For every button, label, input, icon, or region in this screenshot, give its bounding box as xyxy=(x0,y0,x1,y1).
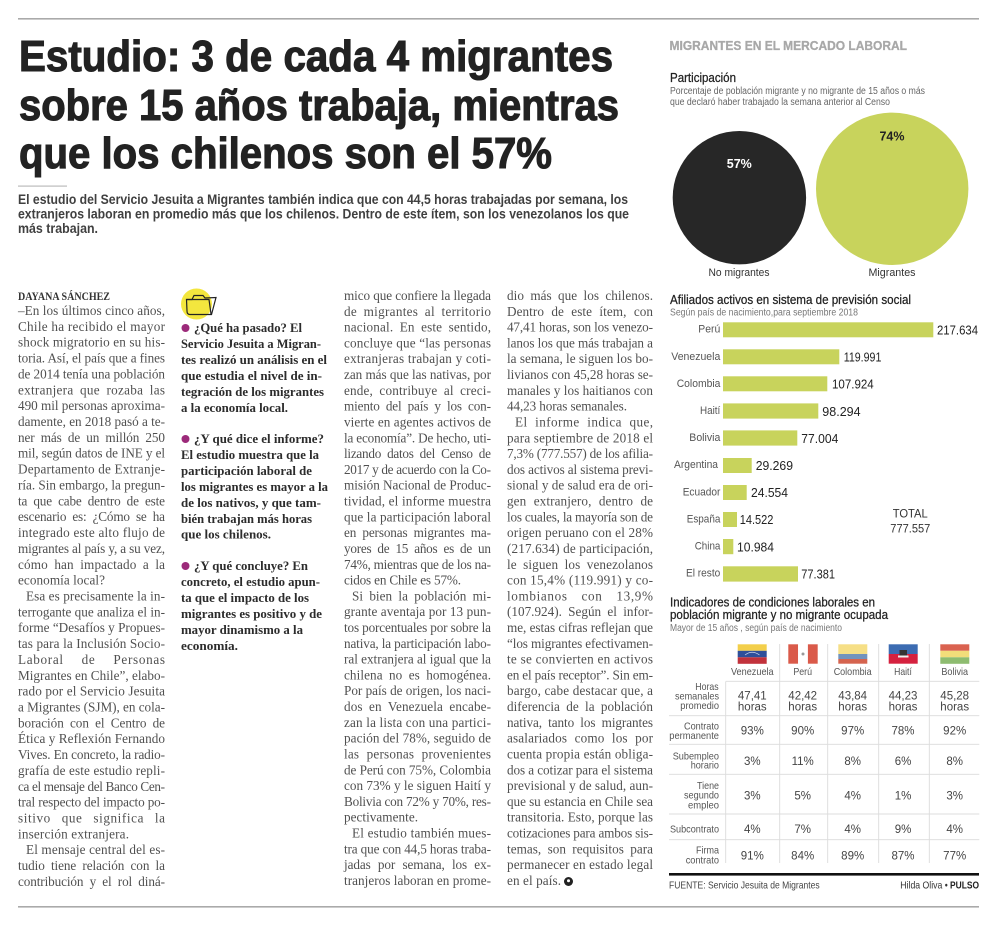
article column 3: zan más que las nativas, por xyxy=(344,367,492,382)
article column 1: 490 mil personas aproxima- xyxy=(18,398,165,413)
article column 4: permanecer en estado legal xyxy=(507,857,653,872)
article column 3: 2017 y de acuerdo con la Co- xyxy=(344,462,491,477)
article column 1: Esa es precisamente la in- xyxy=(26,588,165,604)
question: what the report says: participación laboral de xyxy=(181,463,312,478)
table values: 77% xyxy=(943,850,966,862)
article column 3: miento del país y los con- xyxy=(344,399,491,414)
bar values: 10.984 xyxy=(737,540,774,554)
table values: 45,28 xyxy=(940,691,969,703)
table values: horas xyxy=(738,702,767,714)
article column 4: la semana, le siguen los bo- xyxy=(507,351,653,366)
table values: 90% xyxy=(791,726,814,738)
bar labels: Bolivia xyxy=(689,432,721,444)
bar labels: Haití xyxy=(700,405,720,417)
article column 3: grante aventaja por 13 pun- xyxy=(344,604,491,619)
article column 4: dio más que los chilenos. xyxy=(507,288,653,303)
flag: Bolivia xyxy=(940,644,969,664)
question: what happened: Servicio Jesuita a Migran- xyxy=(181,336,321,351)
icon: Pulso end mark xyxy=(564,877,573,886)
country names: Perú xyxy=(793,666,812,678)
question: what the report says: bién trabajan más horas xyxy=(181,511,312,526)
subtitle: más trabajan. xyxy=(18,220,98,236)
table values: 4% xyxy=(946,824,963,836)
circle: non-migrants 57%: 57% xyxy=(727,157,752,171)
table values: 44,23 xyxy=(889,691,917,703)
panel heading: migrants in the labour market: MIGRANTES EN EL MERCADO LABORAL xyxy=(670,39,907,53)
question: what it concludes: concreto, el estudio apun- xyxy=(181,574,320,589)
article column 1: ner más de un millón 250 xyxy=(18,430,165,445)
title: que los chilenos son el 57% xyxy=(19,129,552,178)
article column 1: extranjera que rozaba las xyxy=(18,382,165,397)
row labels: Tiene xyxy=(697,780,719,792)
article column 4: (107.924). Según el infor- xyxy=(507,604,653,619)
row labels xyxy=(669,681,719,866)
table values: 89% xyxy=(841,850,864,862)
article column 4: 7,3% (777.557) de los afilia- xyxy=(507,446,653,461)
row labels: semanales xyxy=(675,690,719,702)
flag: Colombia xyxy=(838,644,867,664)
article column 1: ría. Sin embargo, la pregun- xyxy=(18,478,165,492)
table values: 4% xyxy=(844,790,861,802)
table values: 9% xyxy=(895,824,911,836)
bar labels xyxy=(671,324,721,580)
question: what it concludes: mayor dinamismo a la xyxy=(181,622,303,637)
article column 3: que la participación laboral xyxy=(344,509,491,524)
subtitle: El estudio del Servicio Jesuita a Migrantes también indica que con 44,5 horas trabajadas por semana, los xyxy=(18,191,628,207)
article column 3: nacional. En este sentido, xyxy=(344,320,491,335)
article column 1: tudio tiene relación con la xyxy=(18,858,165,873)
bar chart heading: Afiliados activos en sistema de previsión social xyxy=(670,293,911,307)
article column 1: Vives. En concreto, la radio- xyxy=(18,747,165,762)
table values: 43,84 xyxy=(838,691,868,703)
row labels: promedio xyxy=(680,700,719,712)
bar values: 217.634 xyxy=(937,324,978,338)
article column 1: cómo han impactado a la xyxy=(18,557,165,572)
article column 4 xyxy=(507,288,654,888)
row labels: Subempleo xyxy=(673,750,719,762)
article column 3: vierte en agentes activos de xyxy=(344,414,491,430)
table values xyxy=(738,691,969,862)
panel: labour conditions table xyxy=(669,596,979,866)
article column 1: de 2014 tenía una población xyxy=(18,366,165,381)
question: what the report says: de los nativos, y que tam- xyxy=(181,495,321,510)
table values: 87% xyxy=(891,850,915,862)
table values: 3% xyxy=(744,790,761,802)
table values: horas xyxy=(940,702,969,714)
question: what it concludes: ¿Y qué concluye? En xyxy=(194,558,309,573)
article column 3: dos en Venezuela encabe- xyxy=(344,699,491,714)
row labels: Subcontrato xyxy=(670,823,719,835)
article column 1: a Migrantes (SJM), en cola- xyxy=(18,700,165,714)
table heading: Mayor de 15 años , según país de nacimiento xyxy=(670,623,842,634)
article column 4: 47,41 horas, son los venezo- xyxy=(507,320,653,335)
table values: 3% xyxy=(946,790,963,802)
bar labels: Venezuela xyxy=(671,351,721,363)
row labels: Horas xyxy=(695,681,719,693)
question: what happened: que estudia el nivel de in- xyxy=(181,368,322,383)
article column 3: pectivamente. xyxy=(344,810,418,825)
article column 3 xyxy=(343,288,492,888)
bar values: 98.294 xyxy=(822,405,861,419)
bar values: 107.924 xyxy=(832,378,874,392)
question: what it concludes: migrantes es positivo y de xyxy=(181,606,322,621)
total callout: 777.557 xyxy=(890,523,930,535)
table values: 97% xyxy=(841,726,864,738)
article column 1: Laboral de Personas xyxy=(18,652,165,667)
table values: 11% xyxy=(792,756,814,768)
article column 4: asalariados como los por xyxy=(507,731,654,746)
circle: non-migrants 57% xyxy=(673,131,806,279)
article column 1: inserción extranjera. xyxy=(18,826,129,841)
question: what happened: a la economía local. xyxy=(181,400,288,415)
article column 4: “los migrantes efectivamen- xyxy=(507,636,653,651)
article column 1: integrado este alto flujo de xyxy=(18,525,165,540)
article column 3: con 73% y le siguen Haití y xyxy=(344,778,491,793)
article column 3: 74%, mientras que de los na- xyxy=(344,557,491,572)
article column 1: El mensaje central del es- xyxy=(26,842,165,857)
article column 1: toria. Así, el país que a fines xyxy=(18,351,165,366)
article column 1: Ética y Reflexión Fernando xyxy=(18,731,165,746)
question: what the report says: que los chilenos. xyxy=(181,526,271,542)
participation heading: Porcentaje de población migrante y no migrante de 15 años o más xyxy=(670,86,925,97)
participation heading xyxy=(670,71,925,108)
table values: horas xyxy=(788,702,817,714)
flag: Haiti xyxy=(889,644,918,664)
circle: non-migrants 57%: No migrantes xyxy=(708,267,770,279)
table heading: Indicadores de condiciones laborales en xyxy=(670,596,875,610)
article column 1: mil, según datos de INE y el xyxy=(18,446,165,461)
table heading xyxy=(670,596,888,634)
bar labels: España xyxy=(687,513,721,525)
article column 4: nativa, tanto los migrantes xyxy=(507,715,653,730)
article column 1: tral respecto del impacto po- xyxy=(18,795,165,810)
title xyxy=(19,32,619,178)
flag: Peru xyxy=(788,644,818,664)
article column 4: sional y de salud era de ori- xyxy=(507,478,653,493)
question: what the report says: ¿Y qué dice el informe? xyxy=(194,431,324,446)
bar values: 77.381 xyxy=(801,567,835,581)
table values: 1% xyxy=(895,790,911,802)
article column 3: pación del 78%, seguido de xyxy=(344,731,491,746)
article column 4: lombianos con 13,9% xyxy=(507,588,653,603)
article column 1: grafía de este estudio repli- xyxy=(18,763,165,778)
article column 1: tas para la Inclusión Socio- xyxy=(18,636,165,651)
article column 4: para septiembre de 2018 el xyxy=(507,430,653,445)
article column 1: Migrantes en Chile”, elabo- xyxy=(18,668,165,683)
table values: 92% xyxy=(943,726,966,738)
article column 3: zan la lista con una partici- xyxy=(344,715,491,730)
article column 3: Bolivia con 72% y 70%, res- xyxy=(344,794,491,809)
question: what happened xyxy=(181,320,327,415)
article column 4: le siguen los venezolanos xyxy=(507,557,653,572)
bar labels: El resto xyxy=(686,568,720,580)
question: what it concludes: ta que el impacto de los xyxy=(181,590,309,605)
article column 3: Si bien la población mi- xyxy=(352,588,491,603)
question: what the report says xyxy=(181,431,328,542)
circle: migrants 74%: 74% xyxy=(879,130,905,144)
article column 1: economía local? xyxy=(18,573,105,588)
row labels: horario xyxy=(691,760,719,772)
article column 3: cidos en Chile es 57%. xyxy=(344,573,461,588)
table values: 5% xyxy=(794,790,811,802)
table values: 8% xyxy=(946,756,963,768)
article column 3: tos porcentuales por sobre la xyxy=(344,620,491,635)
article column 1: contribución y el rol diná- xyxy=(18,874,165,889)
row labels: segundo xyxy=(684,790,719,802)
article column 4: me, estas cifras reflejan que xyxy=(507,620,653,635)
icon: folder xyxy=(181,288,216,320)
subtitle: extranjeros laboran en promedio más que los chilenos. Dentro de este ítem, son los venezolanos los que xyxy=(18,206,629,222)
article column 4: que su estancia en Chile sea xyxy=(507,794,653,809)
panel: participation xyxy=(670,71,968,279)
article column 3: jadas por semana, los ex- xyxy=(343,857,491,872)
article column 1: ta que cabe dentro de este xyxy=(18,493,165,508)
table values: 4% xyxy=(744,824,761,836)
participation heading: Participación xyxy=(670,71,736,85)
article column 3: ende, contribuye al creci- xyxy=(344,383,491,398)
question: what the report says: los migrantes es mayor a la xyxy=(181,479,328,494)
subtitle xyxy=(18,191,629,236)
article column 3: ral extranjera al igual que la xyxy=(344,652,491,667)
country names: Haití xyxy=(894,666,912,678)
bar labels: Argentina xyxy=(674,459,719,471)
article column 3: en personas migrantes ma- xyxy=(344,525,491,540)
bar labels: Colombia xyxy=(677,378,721,390)
table values: 8% xyxy=(844,756,861,768)
article column 3: Por país de origen, los naci- xyxy=(344,683,491,698)
article column 1: Departamento de Extranje- xyxy=(18,462,165,477)
article column 3: misión Nacional de Produc- xyxy=(344,478,491,493)
question: what it concludes: economía. xyxy=(181,638,238,653)
table values: 4% xyxy=(844,824,861,836)
title: Estudio: 3 de cada 4 migrantes xyxy=(19,32,613,81)
credit: Hilda Oliva • xyxy=(900,879,948,891)
bar values xyxy=(737,324,978,581)
article column 3: nativa, la participación labo- xyxy=(344,636,491,651)
question: what happened: ¿Qué ha pasado? El xyxy=(194,320,302,335)
article column 4: (217.634) de participación, xyxy=(507,541,653,556)
article column 4: bargo, cabe destacar que, a xyxy=(507,683,653,698)
article column 1: rado por el Servicio Jesuita xyxy=(18,684,165,699)
article column 4: te se convierten en activos xyxy=(507,652,653,667)
table values: 91% xyxy=(741,850,764,862)
article column 4: dos activos al sistema previ- xyxy=(507,462,653,477)
article column 3: de migrantes al territorio xyxy=(344,304,491,319)
article column 4: 44,23 horas semanales. xyxy=(507,399,627,414)
article column 4: dos a cotizar para el sistema xyxy=(507,762,653,777)
article column 4: livianos con 45,28 horas se- xyxy=(507,367,653,382)
row labels: empleo xyxy=(688,799,719,811)
bars xyxy=(723,322,933,582)
table values: 42,42 xyxy=(788,691,817,703)
article column 1: Chile ha recibido el mayor xyxy=(18,319,166,334)
article column 3: concluye que “las personas xyxy=(344,335,491,350)
article column 3: yores de 15 años es de un xyxy=(344,541,491,556)
article column 4: diferencia de la población xyxy=(507,699,653,714)
bar labels: Perú xyxy=(698,324,720,336)
article column 1: ca el mensaje del Banco Cen- xyxy=(18,779,165,794)
article column 4: previsional y de salud, aun- xyxy=(507,778,653,793)
question: what happened: tegración de los migrantes xyxy=(181,384,324,399)
credit: PULSO xyxy=(950,879,979,891)
row labels: permanente xyxy=(669,730,719,742)
table values: 6% xyxy=(895,756,911,768)
total callout xyxy=(890,509,930,535)
article column 4: los cuales, la mayoría son de xyxy=(507,509,653,524)
article column 1 xyxy=(17,303,166,889)
bar labels: China xyxy=(695,540,721,552)
bar values: 14.522 xyxy=(740,513,773,527)
panel: active affiliates bar chart xyxy=(670,293,978,582)
table values: 84% xyxy=(791,850,814,862)
article column 4: cotizaciones para ambos sis- xyxy=(507,826,653,840)
table values: horas xyxy=(838,702,867,714)
article column 1: terrogante que analiza el in- xyxy=(18,604,165,619)
title: sobre 15 años trabaja, mientras xyxy=(19,81,619,130)
table values: horas xyxy=(889,702,918,714)
article column 4: Dentro de este ítem, con xyxy=(507,304,653,319)
article column 3: tranjeros laboran en prome- xyxy=(344,873,491,888)
total callout: TOTAL xyxy=(893,509,928,521)
circle: migrants 74%: Migrantes xyxy=(868,267,916,279)
article column 1: boración con el Centro de xyxy=(18,715,165,730)
article column 4: lanos los que más trabajan a xyxy=(507,335,653,350)
bar labels: Ecuador xyxy=(683,486,721,498)
article column 4: con 15,4% (119.991) y co- xyxy=(507,573,653,588)
article column 4: en el país. xyxy=(507,873,561,888)
table values: 3% xyxy=(744,756,761,768)
article column 3: las personas provenientes xyxy=(344,746,491,762)
bar values: 77.004 xyxy=(801,432,838,446)
article column 4: en el país receptor”. Sin em- xyxy=(507,667,653,682)
article column 1: damente, en 2018 pasó a te- xyxy=(18,414,165,429)
article column 4: El informe indica que, xyxy=(515,414,653,430)
flag: Venezuela xyxy=(738,644,767,664)
question: what the report says: El estudio muestra que la xyxy=(181,447,319,462)
article column 4: temas, son requisitos para xyxy=(507,841,653,856)
table values: 47,41 xyxy=(738,691,767,703)
country names xyxy=(731,666,968,678)
table values: 7% xyxy=(794,824,811,836)
table heading: población migrante y no migrante ocupada xyxy=(670,608,888,622)
participation heading: que declaró haber trabajado la semana anterior al Censo xyxy=(670,97,890,108)
row labels: Contrato xyxy=(684,720,719,732)
table values: 93% xyxy=(741,726,764,738)
bar values: 24.554 xyxy=(751,486,788,500)
row labels: Firma xyxy=(696,845,719,857)
article column 3: la economía”. De hecho, uti- xyxy=(344,430,491,445)
bar chart heading xyxy=(670,293,911,319)
article column 3: El estudio también mues- xyxy=(352,826,491,840)
bar values: 119.991 xyxy=(844,351,881,365)
country names: Bolivia xyxy=(941,666,968,678)
byline: DAYANA SÁNCHEZ xyxy=(18,289,110,303)
article column 4: cuenta propia están obliga- xyxy=(507,746,653,762)
article column 1: shock migratorio en su his- xyxy=(18,335,165,350)
article column 1: escenario es: ¿Cómo se ha xyxy=(18,509,165,524)
article column 1: sitivo que significa la xyxy=(18,810,165,826)
article column 3: tra que con 44,5 horas traba- xyxy=(344,841,491,856)
article column 1: –En los últimos cinco años, xyxy=(17,303,165,318)
question: what happened: tes realizó un análisis en el xyxy=(181,352,327,367)
table values: 78% xyxy=(891,726,915,738)
article column 3: mico que confiere la llegada xyxy=(344,288,491,303)
article column 3: de Perú con 75%, Colombia xyxy=(344,762,491,777)
article column 1: forme “Desafíos y Propues- xyxy=(18,620,165,635)
article column 1: migrantes al país y, a su vez, xyxy=(18,541,165,556)
bar values: 29.269 xyxy=(756,459,793,473)
article column 4: origen peruano con el 28% xyxy=(507,525,653,540)
panel: summary questions xyxy=(181,320,328,653)
article column 4: manales y los haitianos con xyxy=(507,383,653,398)
source: FUENTE: Servicio Jesuita de Migrantes xyxy=(669,879,820,891)
row labels: contrato xyxy=(686,854,719,866)
country names: Venezuela xyxy=(731,666,774,678)
country names: Colombia xyxy=(834,666,872,678)
circle: migrants 74% xyxy=(816,113,968,279)
article column 4: transitoria. Esto, porque las xyxy=(507,810,653,825)
question: what it concludes xyxy=(181,558,322,653)
article column 3: lizando datos del Censo de xyxy=(344,446,491,461)
article column 4: gen extranjero, dentro de xyxy=(507,494,653,508)
article column 3: chilena no es homogénea. xyxy=(344,667,491,682)
article column 3: tividad, el informe muestra xyxy=(344,494,491,508)
bar chart heading: Según país de nacimiento,para septiembre 2018 xyxy=(670,308,858,319)
article column 3: extranjeras trabajan y coti- xyxy=(344,351,491,366)
